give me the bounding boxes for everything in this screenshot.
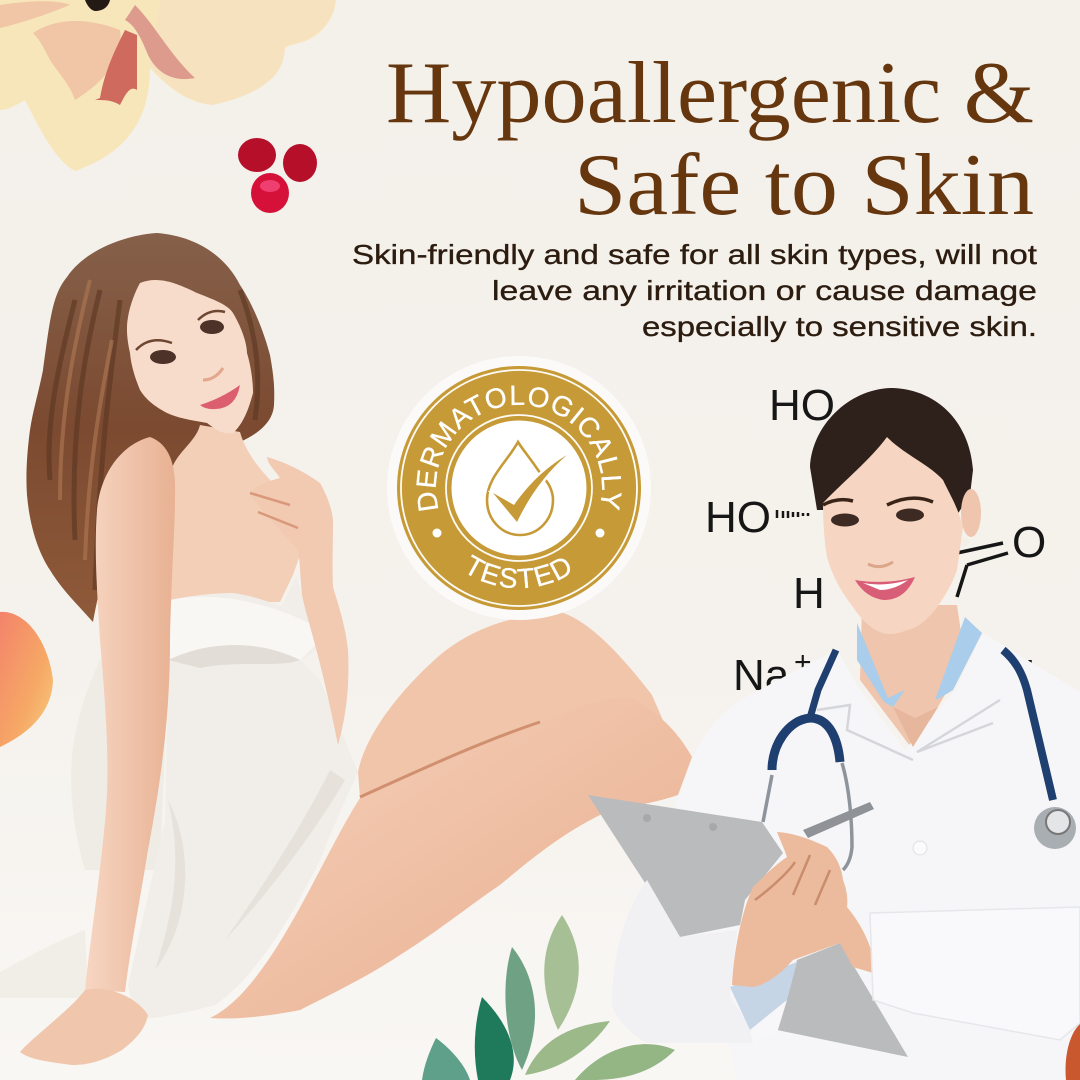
- lips: [200, 385, 240, 409]
- eyes: [831, 514, 859, 526]
- decoration: bottom leaves: [422, 915, 675, 1080]
- description text: leave any irritation or cause damage: [492, 275, 1037, 306]
- chest piece: [1034, 807, 1076, 849]
- left sleeve: [612, 880, 777, 1043]
- towel knot: [282, 577, 310, 618]
- brows: [823, 498, 933, 505]
- shirt cuff: [730, 962, 797, 1030]
- badge: dermatologically tested: TESTED: [468, 554, 570, 588]
- description text: [352, 239, 1037, 342]
- face: [823, 437, 963, 634]
- towel back: [71, 620, 170, 870]
- pen: [803, 802, 874, 838]
- right sleeve cuff: [870, 907, 1080, 1040]
- nose: [203, 368, 223, 380]
- leg crease: [360, 722, 540, 797]
- blue collar: [857, 617, 982, 707]
- description text: especially to sensitive skin.: [642, 311, 1037, 342]
- towel shadow fold: [168, 645, 300, 668]
- chemical formula backdrop: +: [794, 646, 812, 679]
- floor drape: [0, 930, 88, 998]
- near leg: [210, 698, 692, 1018]
- title: [386, 45, 1034, 234]
- chemical formula backdrop: HO: [705, 493, 771, 542]
- supporting hand: [20, 989, 148, 1065]
- chemical formula backdrop: Na: [733, 651, 790, 700]
- eyes: [150, 350, 176, 364]
- neck: [860, 605, 965, 750]
- hair: [26, 233, 274, 622]
- towel: [128, 593, 358, 1020]
- photo: seated woman in towel: [0, 233, 692, 1065]
- badge: dermatologically tested: [387, 356, 651, 620]
- decoration: bottom-right petal: [1066, 1024, 1080, 1080]
- towel lower shading: [155, 770, 345, 970]
- hair: [810, 388, 973, 515]
- decoration: left peach petal: [0, 612, 53, 747]
- hair strands: [49, 290, 258, 590]
- hands: [732, 832, 873, 987]
- clipboard: [588, 795, 783, 937]
- lapel fold lines: [817, 700, 1000, 760]
- chemical formula backdrop: O: [1012, 518, 1046, 567]
- chemical formula backdrop: HO: [769, 381, 835, 430]
- chemical formula backdrop: H: [793, 569, 825, 618]
- coat: [612, 633, 1080, 1080]
- nose: [868, 562, 893, 567]
- title: Hypoallergenic &: [386, 45, 1034, 142]
- stethoscope tubes: [810, 650, 836, 718]
- badge text: DERMATOLOGICALLY: [416, 386, 622, 511]
- v neck: [893, 707, 938, 747]
- chemical formula backdrop: [705, 381, 1046, 700]
- cuff flap: [750, 1000, 787, 1043]
- decoration: top-left watercolor flower: [0, 0, 336, 171]
- finger lines: [755, 855, 830, 905]
- face: [127, 280, 253, 433]
- raised hand and forearm: [250, 457, 348, 745]
- decoration: red berries: [238, 138, 317, 213]
- photo: doctor: [588, 388, 1080, 1080]
- arm: [85, 437, 175, 992]
- smile: [855, 577, 915, 600]
- description text: Skin-friendly and safe for all skin types, will not: [352, 239, 1037, 270]
- neck and chest: [170, 425, 300, 602]
- far leg: [358, 612, 665, 798]
- ear: [961, 489, 981, 537]
- towel top fold: [168, 597, 328, 660]
- coat button: [913, 841, 927, 855]
- earring: [961, 538, 969, 546]
- title: Safe to Skin: [574, 137, 1034, 234]
- icon: drop with check: [487, 442, 553, 535]
